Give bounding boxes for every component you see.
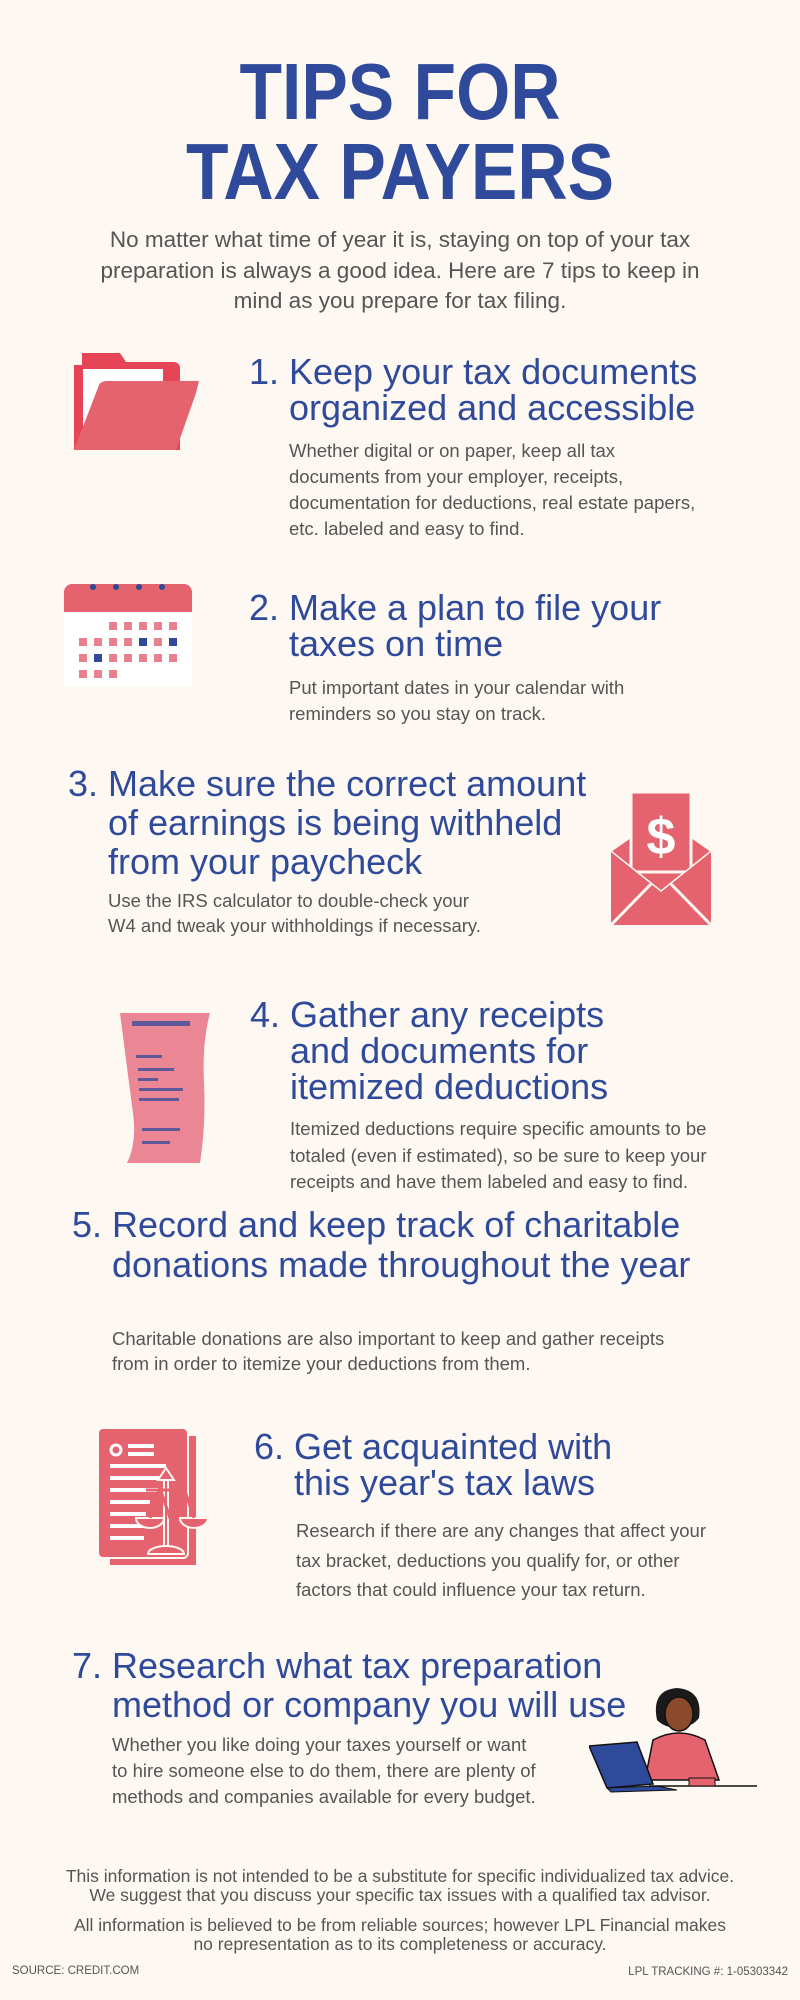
tip 4 heading <box>250 994 608 1107</box>
tip 4 heading: and documents for <box>290 1030 588 1071</box>
tip 4 body <box>290 1118 706 1192</box>
tracking: LPL TRACKING #: 1-05303342 <box>628 1966 788 1978</box>
tip 6 body: factors that could influence your tax return. <box>296 1579 646 1600</box>
tip 2 heading: taxes on time <box>289 623 503 664</box>
source: SOURCE: CREDIT.COM <box>12 1965 139 1977</box>
intro text <box>100 227 700 313</box>
disclaimer: This information is not intended to be a substitute for specific individualized tax advice. <box>66 1866 734 1886</box>
tip 7 heading <box>72 1645 626 1725</box>
tip 4 heading: itemized deductions <box>290 1066 608 1107</box>
text: 3. <box>68 763 98 804</box>
title <box>186 47 614 216</box>
tip 5 body: from in order to itemize your deductions from them. <box>112 1353 530 1374</box>
tip 2 body <box>289 677 624 724</box>
tip 1 heading: organized and accessible <box>289 387 695 428</box>
tip 1 body: documentation for deductions, real estate papers, <box>289 492 695 513</box>
title: TAX PAYERS <box>186 127 614 216</box>
tip 1 body: etc. labeled and easy to find. <box>289 518 525 539</box>
tip 1 body: documents from your employer, receipts, <box>289 466 623 487</box>
text: 5. <box>72 1204 102 1245</box>
tip 5 heading: donations made throughout the year <box>112 1244 690 1285</box>
tip 3 body: Use the IRS calculator to double-check your <box>108 890 469 911</box>
tip 4 body: Itemized deductions require specific amounts to be <box>290 1118 706 1139</box>
icon: calendar <box>64 584 192 686</box>
tip 3 body <box>108 890 481 936</box>
tip 5 heading: Record and keep track of charitable <box>112 1204 680 1245</box>
disclaimer: All information is believed to be from reliable sources; however LPL Financial makes <box>74 1915 726 1935</box>
tip 6 body: tax bracket, deductions you qualify for, or other <box>296 1550 680 1570</box>
tip 6 body: Research if there are any changes that affect your <box>296 1520 706 1541</box>
disclaimer <box>66 1866 734 1954</box>
tip 7 heading: method or company you will use <box>112 1684 626 1725</box>
intro text: mind as you prepare for tax filing. <box>234 288 566 313</box>
tip 1 body <box>289 440 695 539</box>
icon: document with scales <box>99 1429 207 1565</box>
text: 6. <box>254 1426 284 1467</box>
disclaimer: no representation as to its completeness or accuracy. <box>193 1934 607 1954</box>
tip 3 heading: from your paycheck <box>108 841 422 882</box>
tip 4 body: receipts and have them labeled and easy to find. <box>290 1171 688 1192</box>
tip 3 body: W4 and tweak your withholdings if necessary. <box>108 915 481 936</box>
illustration: woman at laptop <box>589 1688 757 1792</box>
tip 2 heading: Make a plan to file your <box>289 587 661 628</box>
tip 6 heading: Get acquainted with <box>294 1426 612 1467</box>
tip 7 heading: Research what tax preparation <box>112 1645 602 1686</box>
intro text: No matter what time of year it is, staying on top of your tax <box>110 227 690 252</box>
text: 7. <box>72 1645 102 1686</box>
intro text: preparation is always a good idea. Here are 7 tips to keep in <box>100 258 700 282</box>
tip 2 heading <box>249 587 661 664</box>
tip 5 body: Charitable donations are also important to keep and gather receipts <box>112 1328 664 1349</box>
tip 1 heading <box>249 351 697 428</box>
text: 4. <box>250 994 280 1035</box>
tip 1 heading: Keep your tax documents <box>289 351 697 392</box>
text: 2. <box>249 587 279 628</box>
tip 5 body <box>112 1328 664 1374</box>
tip 2 body: Put important dates in your calendar with <box>289 677 624 698</box>
tip 6 heading: this year's tax laws <box>294 1462 595 1503</box>
disclaimer: We suggest that you discuss your specific tax issues with a qualified tax advisor. <box>89 1884 711 1904</box>
tip 5 heading <box>72 1204 690 1285</box>
tip 4 body: totaled (even if estimated), so be sure to keep your <box>290 1144 706 1166</box>
icon: envelope with dollar <box>611 794 711 925</box>
tip 3 heading <box>68 763 586 882</box>
tip 6 heading <box>254 1426 612 1503</box>
text: 1. <box>249 351 279 392</box>
tip 3 heading: of earnings is being withheld <box>108 802 562 843</box>
tip 1 body: Whether digital or on paper, keep all tax <box>289 440 615 461</box>
tip 2 body: reminders so you stay on track. <box>289 703 546 724</box>
icon: folder <box>74 353 199 450</box>
icon: receipt <box>120 1013 210 1163</box>
tip 7 body: methods and companies available for every budget. <box>112 1786 536 1807</box>
icon: envelope with dollar: $ <box>647 808 676 866</box>
tip 4 heading: Gather any receipts <box>290 994 604 1035</box>
tip 7 body <box>112 1734 536 1807</box>
tip 7 body: to hire someone else to do them, there are plenty of <box>112 1760 536 1781</box>
title: TIPS FOR <box>240 47 560 136</box>
tip 6 body <box>296 1520 706 1600</box>
tip 3 heading: Make sure the correct amount <box>108 763 586 804</box>
tip 7 body: Whether you like doing your taxes yourself or want <box>112 1734 526 1755</box>
